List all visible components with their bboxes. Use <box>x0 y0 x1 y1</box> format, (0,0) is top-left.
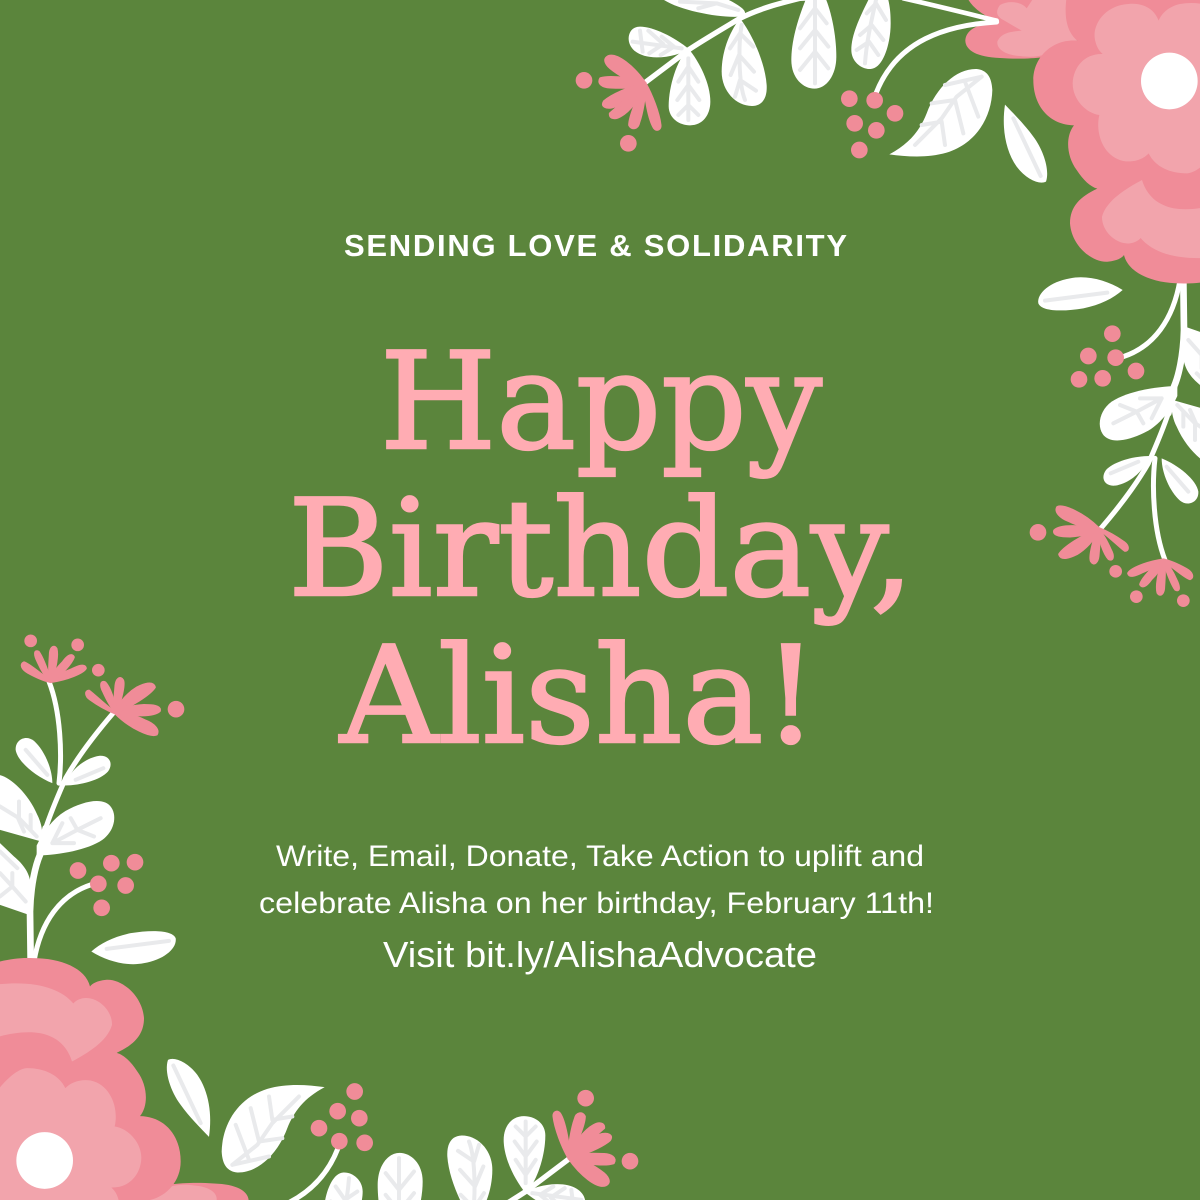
call to action text: celebrate Alisha on her birthday, February 11th! <box>259 887 934 920</box>
floral corner: top right <box>576 0 1200 607</box>
pink sprig flower, left <box>1030 507 1127 578</box>
call to action text <box>259 840 934 975</box>
floral corner: bottom left <box>0 635 638 1200</box>
pink sprig flower, right <box>1129 560 1192 607</box>
stems of the hanging branch <box>1100 280 1184 560</box>
title: happy birthday, alisha: Alisha! <box>339 618 818 774</box>
title: happy birthday, alisha: Birthday, <box>288 471 914 627</box>
branch with leaves and pink sprig, top <box>576 0 903 152</box>
call to action text: Write, Email, Donate, Take Action to uplift and <box>276 840 924 873</box>
title: happy birthday, alisha <box>288 324 914 774</box>
hanging branch with leaves, sprigs and berries, right <box>1030 277 1200 607</box>
pink sprig flower <box>576 56 660 152</box>
heading: sending love and solidarity: SENDING LOVE & SOLIDARITY <box>344 228 847 263</box>
title: happy birthday, alisha: Happy <box>380 324 822 480</box>
call to action text: Visit bit.ly/AlishaAdvocate <box>383 934 817 975</box>
large flower with leaves and berries <box>841 0 1200 283</box>
